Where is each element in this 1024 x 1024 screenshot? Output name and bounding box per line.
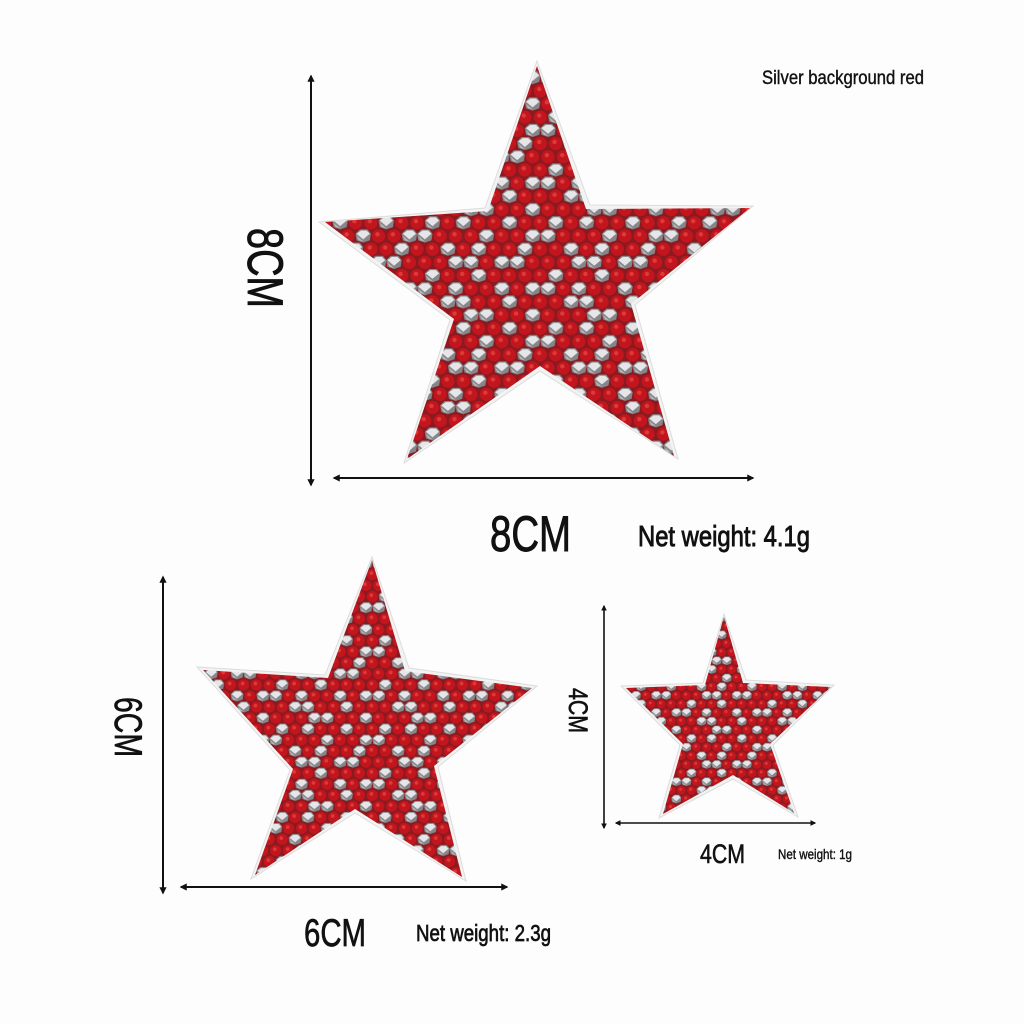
vertical arrow: 8cm height [310, 76, 312, 485]
horizontal arrow: 6cm width [181, 886, 507, 888]
label: net weight 1g: Net weight: 1g [778, 846, 852, 862]
horizontal arrow: 8cm width [334, 477, 753, 479]
label: net weight 2.3g: Net weight: 2.3g [416, 920, 551, 946]
label: 4CM width: 4CM [700, 839, 745, 869]
vertical arrow: 6cm height [162, 577, 164, 893]
label: 6CM width: 6CM [304, 912, 366, 955]
large star: 8cm [319, 61, 753, 463]
medium star: 6cm [197, 557, 537, 881]
note: colour name: Silver background red [762, 68, 924, 89]
small star: 4cm [621, 614, 834, 818]
label: 6CM height: 6CM [106, 697, 149, 757]
label: net weight 4.1g: Net weight: 4.1g [638, 521, 810, 553]
vertical arrow: 4cm height [603, 606, 605, 828]
label: 4CM height: 4CM [563, 688, 593, 733]
label: 8CM width: 8CM [490, 506, 571, 562]
horizontal arrow: 4cm width [616, 822, 815, 824]
label: 8CM height: 8CM [237, 228, 293, 308]
